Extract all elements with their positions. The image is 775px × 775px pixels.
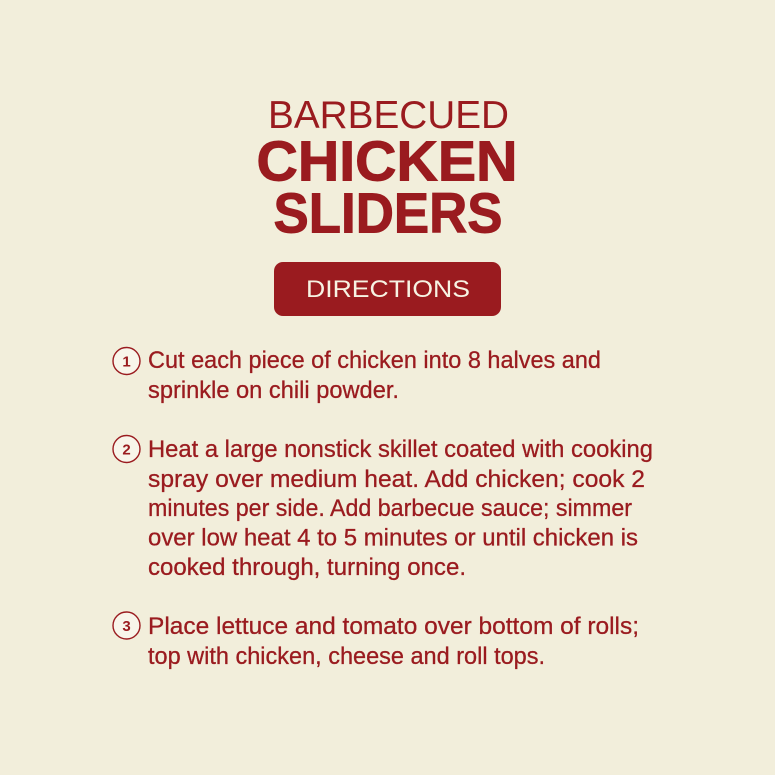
directions badge: DIRECTIONS xyxy=(306,276,470,303)
title xyxy=(256,94,518,244)
step 2 text: Heat a large nonstick skillet coated with cooking xyxy=(148,436,653,463)
step number 1 xyxy=(113,348,140,374)
directions badge xyxy=(274,262,501,316)
title: BARBECUED xyxy=(268,94,509,137)
step 1 text xyxy=(148,347,601,404)
step 2 text: over low heat 4 to 5 minutes or until chicken is xyxy=(148,524,638,552)
step 3 text: top with chicken, cheese and roll tops. xyxy=(148,643,545,670)
step number 1: 1 xyxy=(122,354,131,370)
step number 3: 3 xyxy=(122,618,131,635)
step number 2 xyxy=(113,436,140,462)
step 3 xyxy=(113,612,639,670)
step 1 text: Cut each piece of chicken into 8 halves and xyxy=(148,347,601,374)
step 3 text: Place lettuce and tomato over bottom of rolls; xyxy=(148,613,639,640)
step number 3 xyxy=(113,612,140,639)
title: SLIDERS xyxy=(274,182,502,244)
step 2 xyxy=(113,436,653,581)
step 3 text xyxy=(148,613,639,670)
step 2 text: minutes per side. Add barbecue sauce; simmer xyxy=(148,495,632,522)
step 1 text: sprinkle on chili powder. xyxy=(148,377,399,404)
step number 2: 2 xyxy=(122,442,131,458)
step 2 text: spray over medium heat. Add chicken; cook 2 xyxy=(148,466,645,493)
step 2 text: cooked through, turning once. xyxy=(148,554,466,581)
title: CHICKEN xyxy=(256,130,518,192)
step 1 xyxy=(113,347,601,404)
step 2 text xyxy=(148,436,653,581)
